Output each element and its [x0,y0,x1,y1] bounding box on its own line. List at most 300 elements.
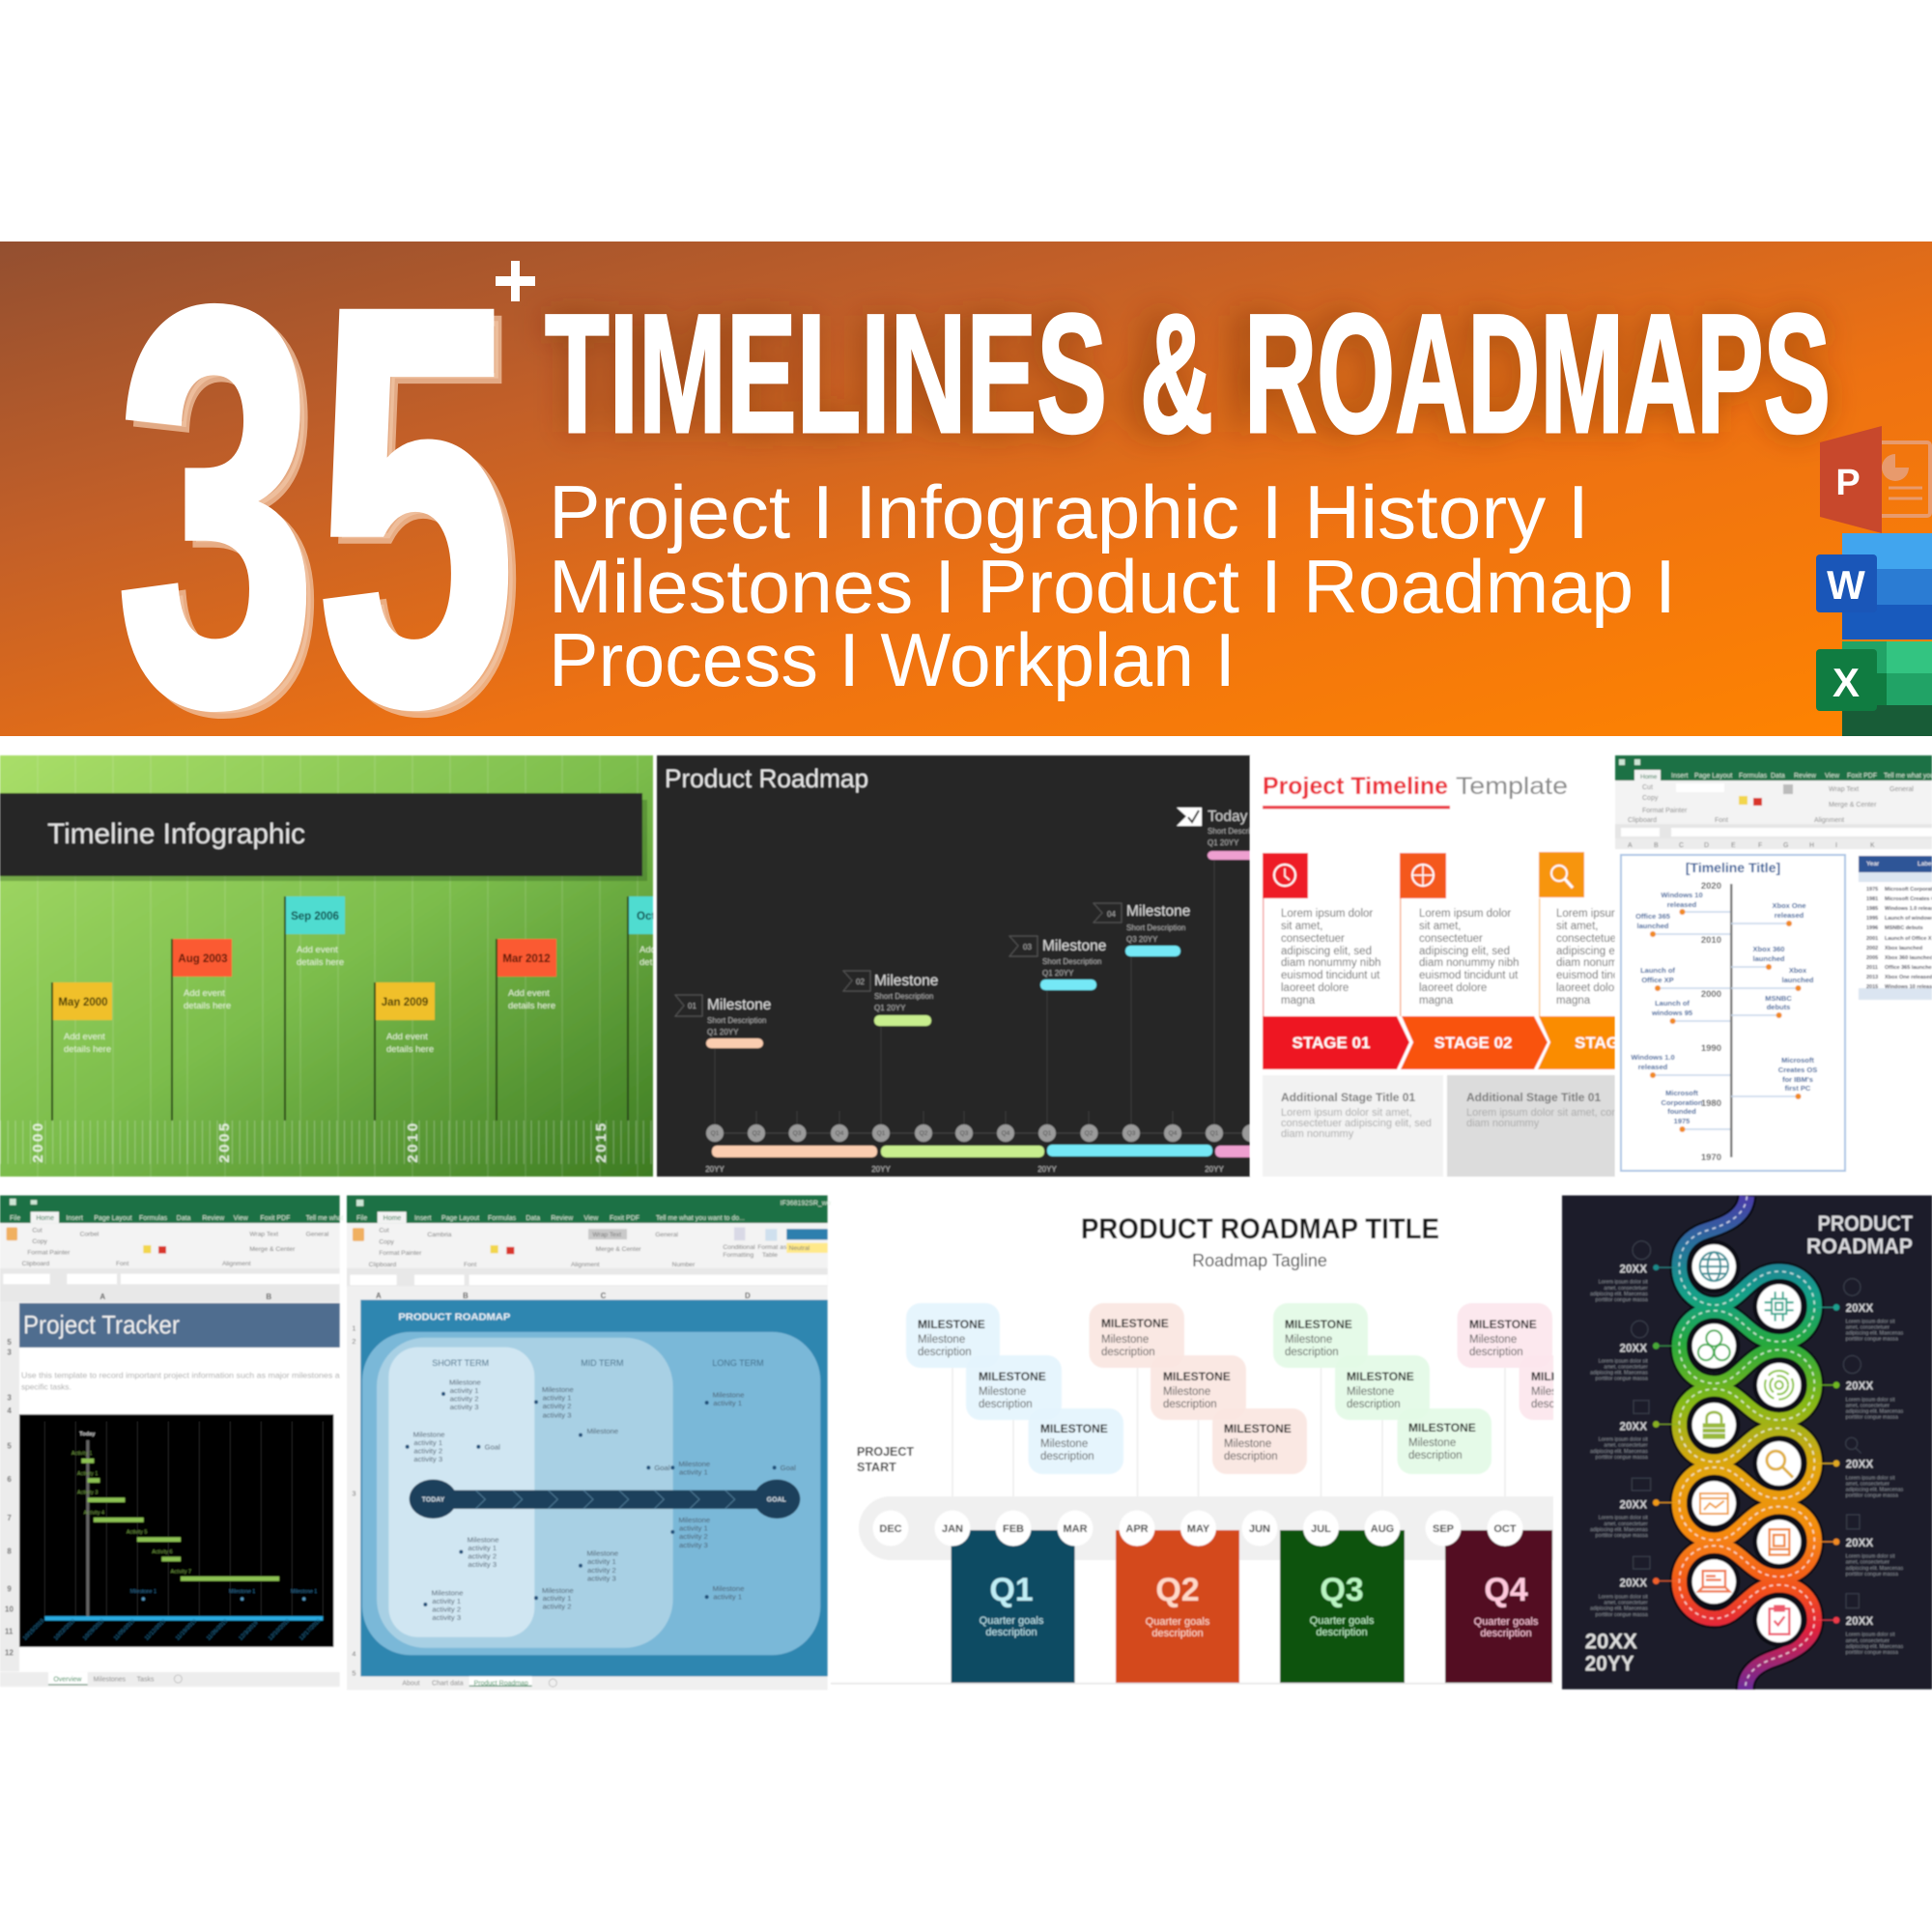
panel: quarterly product roadmap [831,1195,1599,1688]
icon: PowerPoint [1820,426,1930,533]
row numbers: 5 [7,1442,12,1451]
excel ribbon: Number [672,1262,696,1268]
tracker title band [19,1303,340,1348]
milestone 01: Milestone [707,997,771,1013]
excel ribbon: Merge & Center [1829,802,1877,809]
roadmap sheet: Goal [781,1463,796,1472]
flag Oct: Add [639,945,656,955]
right labels: 20XX [1846,1459,1873,1471]
icon: Word [1816,533,1932,639]
gantt chart: Milestone 1 [229,1589,255,1595]
left labels [1590,1241,1679,1618]
additional stage boxes: diam nonummy [1281,1128,1354,1140]
panel: product roadmap (dark): Q2 [753,1130,761,1137]
icon: tablet [1770,1529,1789,1555]
milestone 02: 02 [856,978,865,986]
milestone 04: Milestone [1126,903,1190,920]
excel ribbon: G [1783,842,1788,849]
timeline chart: launched [1782,976,1814,984]
stage arrows [1263,1016,1653,1069]
stage 01 card: euismod tincidunt ut [1281,970,1380,981]
row numbers: 5 [352,1668,355,1677]
roadmap sheet: activity 2 [543,1603,571,1611]
milestone cards: Q2: Milestone [1163,1386,1210,1398]
roadmap title: Roadmap Tagline [1192,1251,1327,1270]
milestone 02: Short Description [874,992,933,1001]
right labels: adipiscing elit. Maecenas [1846,1644,1903,1650]
excel ribbon: B [463,1292,469,1300]
flag Jan 2009: details here [386,1044,434,1055]
left labels: amet, consectetuer [1604,1365,1648,1371]
excel ribbon: Cambria [427,1232,452,1238]
excel ribbon: Wrap Text [249,1231,278,1237]
panel: quarterly product roadmap: AUG [1371,1523,1394,1535]
milestone 04 [1094,903,1190,956]
milestone cards: Q2: MILESTONE [1101,1317,1169,1330]
excel ribbon: E [1731,842,1736,849]
milestone 03: Milestone [1042,938,1106,954]
excel ribbon: Calibri [1682,786,1701,793]
flag Sep 2006: details here [297,957,344,968]
milestone cards: Q3: MILESTONE [1408,1421,1476,1435]
roadmap sheet: activity 1 [450,1386,478,1395]
excel ribbon: Page Layout [94,1215,132,1222]
excel ribbon: Merge & Center [596,1246,641,1253]
right labels: amet, consectetuer [1846,1324,1889,1330]
flag Mar 2012: details here [508,1001,555,1011]
stage 03 card: laoreet dolore [1556,982,1624,994]
stage arrows: STAGE 02 [1435,1034,1512,1052]
panel: quarterly product roadmap: FEB [1003,1523,1024,1535]
timeline chart: released [1638,1063,1668,1071]
left labels: amet, consectetuer [1604,1443,1648,1449]
roadmap sheet: MID TERM [581,1358,623,1368]
roadmap sheet: Milestone [542,1586,574,1595]
sheet tabs: Milestones [94,1676,127,1683]
flag Sep 2006 [284,896,345,1121]
milestone cards: Q1 [906,1303,1123,1474]
timeline chart: Microsoft [1781,1056,1814,1065]
roadmap sheet: activity 1 [679,1467,708,1476]
excel ribbon: Review [551,1215,574,1222]
excel ribbon: Alignment [1814,817,1844,824]
timeline chart: 1970 [1701,1152,1721,1163]
milestone 04: Short Description [1126,923,1185,932]
milestone cards: Q3: description [1408,1450,1463,1462]
left labels: Lorem ipsum dolor sit [1599,1516,1648,1521]
icon: laptop [1698,1571,1729,1591]
stage 03 card: adipiscing elit [1556,946,1624,957]
excel ribbon: Copy [1642,795,1659,802]
data table: Xbox One released [1885,975,1932,980]
icon: lock [1703,1412,1725,1439]
quarter blocks [952,1530,1552,1683]
excel ribbon: Alignment [222,1261,251,1267]
today marker: Today [1208,809,1248,825]
gantt chart: Milestone 1 [130,1589,156,1595]
tracker title band: Project Tracker [23,1311,180,1340]
panel: product roadmap (dark): 20YY [1205,1165,1224,1174]
data table: 2001 [1866,936,1878,942]
milestone cards: Q1: Milestone [918,1334,965,1346]
right labels: adipiscing elit. Maecenas [1846,1330,1903,1336]
panel: product roadmap (dark): Q3 [960,1130,969,1137]
right labels: amet, consectetuer [1846,1638,1889,1644]
gantt chart: 11/05/2019 [113,1618,136,1642]
stage 01 card: consectetuer [1281,933,1345,945]
left labels: amet, consectetuer [1604,1521,1648,1527]
milestone 02 [843,971,938,1026]
excel ribbon: Alignment [571,1262,600,1268]
additional stage boxes [1263,1075,1629,1177]
excel ribbon: Data [526,1215,540,1222]
timeline chart: Xbox One [1772,901,1806,910]
milestone cards: Q1: description [1040,1451,1094,1463]
milestone 04: 04 [1107,910,1116,919]
icon: clipboard [1770,1606,1789,1634]
data table: 2011 [1866,965,1878,971]
milestone cards: Q4 [1457,1303,1599,1420]
gantt chart: 11/12/2019 [144,1618,167,1642]
flag Aug 2003: Aug 2003 [178,953,228,965]
roadmap sheet: Milestone [586,1549,618,1558]
quarter nodes [706,1124,1260,1142]
stage 01 card [1263,853,1381,1016]
milestone 01: 01 [688,1002,696,1010]
title bar: Timeline Infographic [47,818,305,850]
timeline chart: Launch of [1655,999,1690,1008]
left labels: Lorem ipsum dolor sit [1599,1358,1648,1365]
panel: quarterly product roadmap: MAY [1187,1523,1210,1535]
panel: product roadmap (dark): Q3 [793,1130,802,1137]
quarter labels: Q3 [1320,1572,1364,1608]
panel: quarterly product roadmap: DEC [879,1523,902,1535]
right labels: adipiscing elit. Maecenas [1846,1566,1903,1572]
panel: quarterly product roadmap: MAR [1063,1523,1088,1535]
excel ribbon: C [601,1292,607,1300]
timeline chart: windows 95 [1651,1009,1692,1017]
stage 01 card: laoreet dolore [1281,982,1349,994]
timeline chart: founded [1667,1107,1696,1116]
gantt chart: 12/10/2019 [268,1618,291,1642]
data table: 2002 [1866,946,1878,952]
roadmap sheet: activity 3 [450,1403,478,1411]
milestone cards: Q2: Milestone [1101,1334,1149,1346]
excel ribbon: General [655,1232,679,1238]
project start label: START [857,1461,896,1474]
excel ribbon: Clipboard [22,1261,49,1267]
date range: 20YY [1585,1651,1634,1676]
timeline chart: for IBM's [1782,1075,1813,1084]
data table: Xbox launched [1885,946,1922,952]
right labels: adipiscing elit. Maecenas [1846,1488,1903,1493]
timeline chart: Xbox [1789,966,1807,975]
heading: ROADMAP [1806,1234,1913,1259]
timeline chart [1621,855,1845,1171]
main heading: TIMELINES [545,280,1107,469]
roadmap sheet: activity 1 [587,1557,616,1566]
sheet tabs: Chart data [432,1680,464,1687]
today marker [1176,806,1250,862]
excel ribbon: Home [384,1215,401,1222]
roadmap sheet: activity 3 [543,1410,571,1419]
milestone cards: Q2: description [1163,1399,1217,1410]
right labels: porttitor congue massa [1846,1415,1898,1421]
excel ribbon: Formulas [1739,773,1768,780]
stage 02 card: euismod tincidunt ut [1419,970,1519,981]
excel ribbon: Format Painter [379,1250,422,1257]
icon: Excel: X [1833,660,1860,705]
right labels: 20XX [1846,1302,1873,1315]
excel ribbon: Format Painter [27,1249,71,1256]
excel ribbon: Home [36,1215,54,1222]
date range: 20XX [1585,1629,1637,1654]
right labels: adipiscing elit. Maecenas [1846,1409,1903,1415]
left labels: adipiscing elit. Maecenas [1590,1449,1648,1455]
excel ribbon: Tell me what [306,1215,344,1222]
sheet tabs: Product Roadmap [474,1680,528,1687]
milestone 02: Q1 20YY [874,1004,906,1012]
roadmap sheet: activity 2 [432,1605,461,1613]
excel ribbon: General [1889,786,1914,793]
timeline chart: Windows 10 [1661,891,1703,899]
milestone cards: Q1: Milestone [979,1386,1026,1398]
panel: product roadmap excel [347,1195,844,1690]
data table: 1975 [1866,887,1878,893]
gantt chart: 11/26/2019 [206,1618,229,1642]
right labels: Lorem ipsum dolor sit [1846,1633,1895,1638]
gantt chart: Activity 3 [77,1491,98,1496]
panel: product roadmap (dark): Q4 [1169,1130,1178,1137]
quarter labels: description [1316,1627,1368,1638]
panel: product roadmap (dark) [657,755,1273,1177]
milestone items [406,1392,777,1606]
panel: product roadmap (dark): Q4 [1002,1130,1010,1137]
axis years: 2015 [593,1121,610,1163]
excel ribbon: File [10,1215,20,1222]
roadmap sheet: activity 2 [543,1402,571,1410]
excel ribbon: File [356,1215,367,1222]
axis years: 2000 [30,1121,46,1163]
stage 02 card: consectetuer [1419,933,1483,945]
flag Sep 2006: Add event [297,945,338,955]
panel: project tracker excel [0,1195,344,1690]
milestone cards: Q2: description [1224,1451,1278,1463]
roadmap sheet: Goal [485,1442,500,1451]
additional stage boxes: Lorem ipsum dolor sit amet, [1281,1107,1412,1119]
excel ribbon: H [1809,842,1814,849]
quarter labels [980,1572,1539,1639]
milestone 03: Short Description [1042,957,1101,966]
sheet tabs [402,1676,556,1687]
flag May 2000: Add event [64,1032,105,1042]
row numbers [352,1324,355,1677]
roadmap title: PRODUCT ROADMAP TITLE [1081,1213,1439,1245]
additional stage boxes: Additional Stage Title 01 [1281,1091,1415,1104]
road stops [1688,1239,1805,1647]
panel: product roadmap (dark): Q3 [1127,1130,1136,1137]
roadmap sheet: activity 3 [413,1455,442,1463]
excel ribbon: Page Layout [441,1215,479,1222]
flag Aug 2003: details here [184,1001,231,1011]
right labels: porttitor congue massa [1846,1572,1898,1577]
right labels: Lorem ipsum dolor sit [1846,1554,1895,1560]
flag Sep 2006: Sep 2006 [291,911,339,923]
excel ribbon: Table [762,1252,778,1259]
right labels: Lorem ipsum dolor sit [1846,1397,1895,1403]
panel: product roadmap (dark): 20YY [871,1165,891,1174]
roadmap sheet: activity 3 [679,1541,708,1549]
milestone 04: Q3 20YY [1126,935,1158,944]
quarter labels: Quarter goals [1310,1615,1375,1627]
excel ribbon: Page Layout [1694,773,1732,780]
stage 02 card: magna [1419,995,1454,1007]
gantt chart: 10/15/2019 [22,1618,45,1642]
row numbers: 9 [7,1584,12,1593]
excel ribbon: IF368192SR_word32 [781,1201,844,1208]
excel ribbon: View [234,1215,249,1222]
milestone 03 [1009,936,1106,990]
milestone 01: Short Description [707,1016,766,1025]
excel ribbon: Copy [379,1238,395,1245]
milestone 03: 03 [1023,943,1032,952]
description: Use this template to record important project information such as major milestones a [21,1371,340,1380]
milestone cards: Q1: MILESTONE [918,1318,985,1331]
flag Mar 2012: Mar 2012 [502,953,551,965]
row numbers: 3 [352,1489,355,1497]
excel ribbon: Cut [32,1228,43,1235]
panel: product roadmap (dark): Q1 [711,1130,720,1137]
row numbers: 11 [5,1627,14,1635]
roadmap sheet: Milestone [449,1378,481,1386]
roadmap sheet: activity 3 [432,1613,461,1622]
panel: quarterly product roadmap: JUN [1249,1523,1270,1535]
panel: quarterly product roadmap: JUL [1311,1523,1331,1535]
timeline chart: 1990 [1701,1043,1721,1054]
gantt chart: Activity 1 [71,1451,92,1457]
timeline chart: debuts [1767,1003,1790,1011]
stage 02 card: adipiscing elit, sed [1419,946,1510,957]
excel ribbon: B [1654,842,1659,849]
flag Jan 2009: Add event [386,1032,428,1042]
gantt chart: 11/19/2019 [175,1618,198,1642]
left labels: Lorem ipsum dolor sit [1599,1280,1648,1286]
timeline chart: 2000 [1701,989,1721,1000]
left labels: 20XX [1619,1342,1647,1354]
today marker: Q1 20YY [1208,838,1239,847]
data table: 2015 [1866,984,1878,990]
panel: quarterly product roadmap: SEP [1433,1523,1454,1535]
quarter labels: description [985,1627,1037,1638]
left labels: porttitor congue massa [1596,1377,1648,1382]
milestone cards: Q2: Milestone [1224,1438,1271,1450]
quarter labels: Q2 [1155,1572,1200,1608]
excel ribbon: View [1825,773,1840,780]
milestone cards: Q1: Milestone [1040,1438,1088,1450]
quarter labels: Quarter goals [980,1615,1044,1627]
data table: 1996 [1866,925,1878,931]
stage 02 card: diam nonummy nibh [1419,957,1520,969]
project start label: PROJECT [857,1445,914,1459]
stage 02 card [1400,853,1520,1016]
gantt chart: Activity 4 [84,1510,104,1516]
axis years: 2005 [216,1121,233,1163]
roadmap sheet: activity 2 [679,1532,708,1541]
panel: product roadmap (dark): 20YY [1037,1165,1057,1174]
roadmap sheet: LONG TERM [712,1358,764,1368]
row numbers: 10 [5,1605,14,1614]
roadmap title [1081,1213,1439,1270]
milestone cards: Q2: description [1101,1347,1155,1358]
timeline chart: 1980 [1701,1098,1721,1109]
row numbers [5,1338,14,1657]
additional stage boxes: Lorem ipsum dolor sit amet, conse [1466,1107,1629,1119]
excel ribbon: Insert [1671,773,1689,780]
number 35 with shadow: 35 [125,200,523,827]
excel ribbon: View [583,1215,599,1222]
roadmap sheet: activity 1 [713,1592,742,1602]
gantt chart: 12/3/2019 [239,1620,260,1642]
milestone cards: Q3: MILESTONE [1285,1318,1352,1331]
gantt chart: Activity 6 [152,1549,173,1555]
milestone cards: Q3: Milestone [1347,1386,1394,1398]
row numbers: 3 [7,1348,12,1356]
description [21,1371,340,1392]
stage 03 card: consectetuer [1556,933,1620,945]
excel ribbon: K [1870,842,1875,849]
right labels: amet, consectetuer [1846,1482,1889,1488]
excel ribbon: Font [1715,817,1728,824]
additional stage boxes: Additional Stage Title 01 [1466,1091,1601,1104]
excel ribbon: Foxit PDF [260,1215,291,1222]
panel heading [1263,773,1568,810]
timeline chart: Launch of [1640,966,1675,975]
title bar [0,793,647,881]
data table: 2013 [1866,975,1878,980]
timeline chart: launched [1753,954,1785,963]
timeline chart: 2020 [1701,881,1721,892]
roadmap sheet: Milestone [432,1588,463,1597]
panel: quarterly product roadmap: OCT [1493,1523,1517,1535]
main heading: & [1140,280,1213,469]
month track [859,1496,1593,1560]
right labels: amet, consectetuer [1846,1403,1889,1408]
roadmap sheet: activity 3 [468,1560,497,1569]
milestone 02: Milestone [874,973,938,989]
excel ribbon: Insert [414,1215,432,1222]
panel title: Product Roadmap [665,764,868,793]
right labels: Lorem ipsum dolor sit [1846,1319,1895,1324]
roadmap sheet: activity 2 [468,1552,497,1561]
excel ribbon: Wrap Text [592,1232,621,1238]
month circles [873,1511,1522,1546]
roadmap sheet: Milestone [713,1584,744,1593]
excel ribbon: Merge & Center [249,1246,296,1253]
today marker: Short Description [1208,827,1266,836]
left labels: amet, consectetuer [1604,1601,1648,1606]
milestone cards: Q3: Milestone [1285,1334,1332,1346]
milestone cards: Q2: MILESTONE [1224,1422,1292,1435]
flag May 2000 [51,982,112,1121]
flag Mar 2012: Add event [508,988,550,999]
row numbers: 8 [7,1548,12,1556]
row numbers: 3 [7,1394,12,1403]
excel ribbon: Font [116,1261,128,1267]
milestone 01: Q1 20YY [707,1028,739,1037]
icon: Excel [1816,641,1932,736]
excel ribbon: Wrap Text [1829,786,1859,793]
sheet tabs [0,1672,340,1687]
